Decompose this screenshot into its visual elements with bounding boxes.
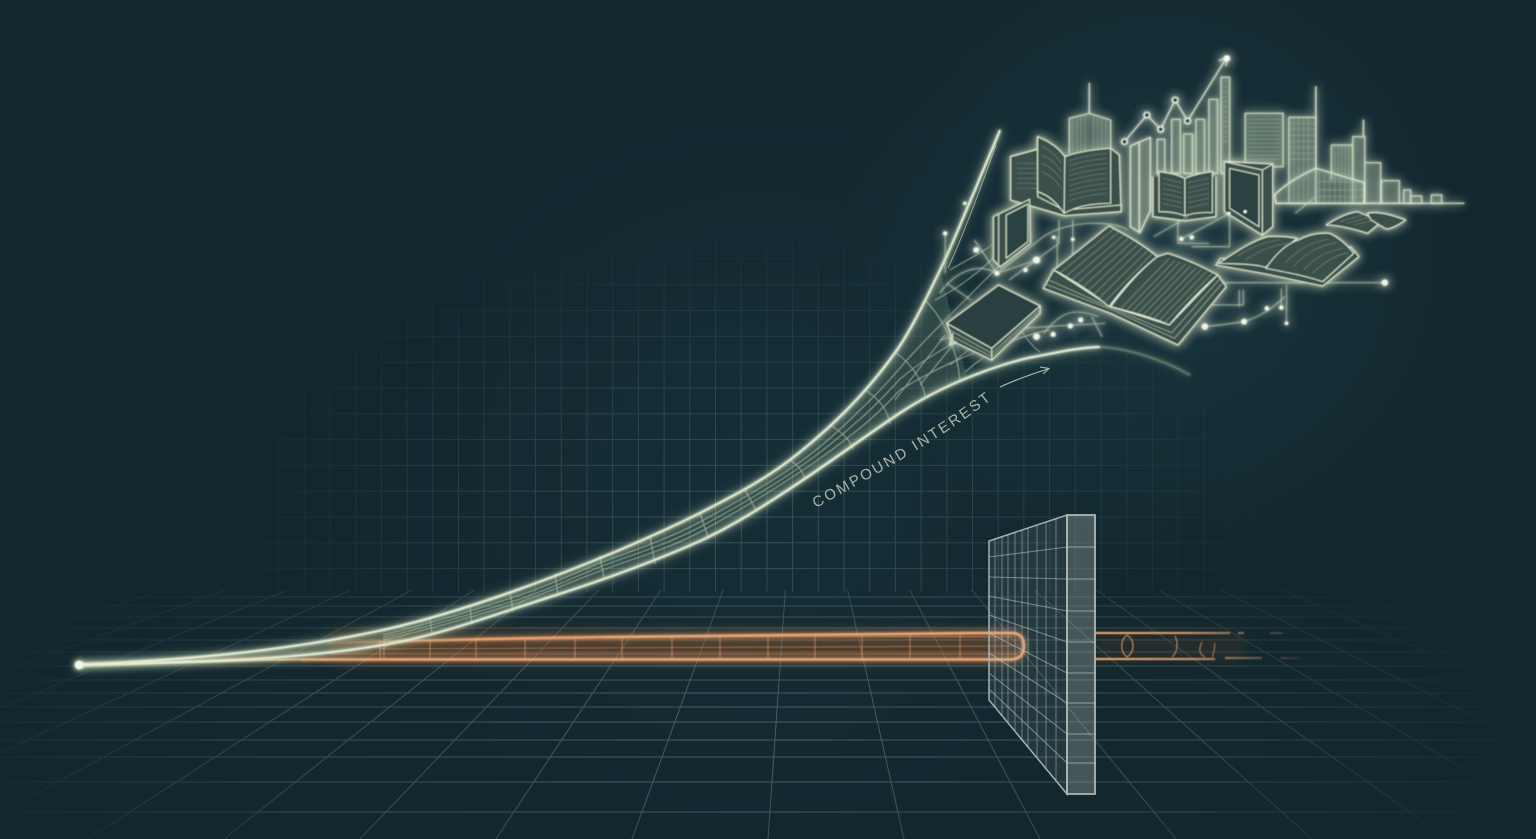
label: compound interest: COMPOUND INTEREST bbox=[813, 392, 988, 506]
far small book bbox=[1326, 212, 1405, 233]
standing book right bbox=[1224, 162, 1273, 235]
wall bbox=[989, 515, 1095, 794]
curve body bbox=[78, 270, 967, 665]
rising bars bbox=[1157, 77, 1230, 173]
back wall grid bbox=[288, 272, 1192, 592]
floor perspective grid bbox=[0, 590, 1480, 839]
destination: city of books and chart bbox=[940, 55, 1464, 360]
open book upper left bbox=[1011, 137, 1121, 216]
open book centre bbox=[1153, 172, 1216, 221]
closed book bbox=[947, 285, 1040, 360]
open book lower right bbox=[1216, 233, 1359, 286]
curve mesh bbox=[383, 225, 1050, 640]
exponential growth: green curve bbox=[78, 130, 1190, 665]
standing book left bbox=[993, 199, 1030, 267]
tall book slab bbox=[1130, 137, 1150, 233]
linear growth: orange tube bbox=[78, 630, 1300, 665]
wall left face bbox=[989, 515, 1067, 794]
large open book bbox=[1043, 226, 1226, 345]
origin point bbox=[75, 661, 83, 669]
skyline buildings bbox=[1069, 83, 1464, 203]
broken tube past the wall bbox=[1095, 633, 1300, 659]
growth line arrow bbox=[1122, 55, 1230, 144]
small arrow bbox=[1000, 367, 1049, 387]
wall right face bbox=[1067, 515, 1095, 794]
circuit lines and nodes bbox=[940, 197, 1388, 340]
